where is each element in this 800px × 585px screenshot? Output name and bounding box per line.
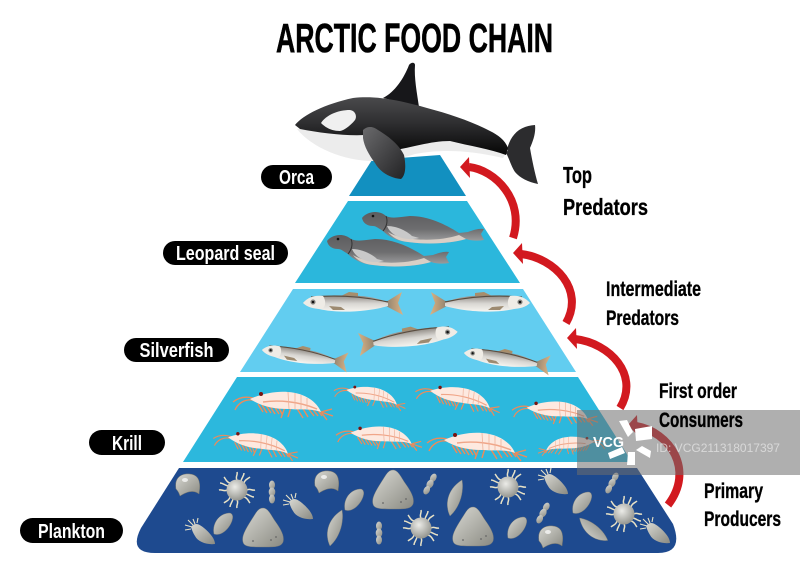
pyramid tier: orca bbox=[349, 155, 466, 196]
caption: Intermediate Predators bbox=[606, 278, 701, 330]
pyramid tier: silverfish bbox=[240, 289, 576, 372]
caption: Primary Producers: Primary bbox=[704, 480, 763, 503]
plankton group bbox=[176, 468, 670, 548]
label: Silverfish: Silverfish bbox=[140, 340, 214, 362]
watermark: VCG bbox=[593, 434, 624, 451]
caption: Top Predators: Predators bbox=[563, 194, 648, 220]
silverfish group bbox=[260, 292, 551, 375]
watermark: ID: VCG211318017397 bbox=[656, 441, 780, 455]
krill group bbox=[212, 383, 606, 461]
seal upper bbox=[362, 212, 484, 243]
label: Orca: Orca bbox=[279, 167, 315, 189]
label: Orca bbox=[261, 165, 332, 189]
label: Leopard seal: Leopard seal bbox=[176, 243, 275, 265]
caption: Top Predators: Top bbox=[563, 162, 592, 188]
arrow: orca to seal bbox=[460, 157, 516, 238]
label: Plankton: Plankton bbox=[38, 521, 105, 543]
arrow: seal to silverfish bbox=[513, 243, 572, 323]
label: Krill: Krill bbox=[112, 433, 142, 455]
caption: First order Consumers: Consumers bbox=[659, 409, 743, 432]
caption: Top Predators bbox=[563, 162, 648, 220]
arrow: silverfish to krill bbox=[567, 328, 626, 408]
pyramid tier: krill bbox=[183, 377, 632, 462]
orca bbox=[295, 63, 538, 184]
label: Krill bbox=[89, 430, 165, 455]
seal lower bbox=[327, 235, 449, 266]
arrow: krill to plankton bbox=[628, 415, 679, 505]
caption: First order Consumers bbox=[659, 380, 743, 432]
title: ARCTIC FOOD CHAIN bbox=[276, 15, 553, 61]
caption: Intermediate Predators: Predators bbox=[606, 307, 679, 330]
pyramid tier: plankton bbox=[137, 468, 676, 553]
caption: Intermediate Predators: Intermediate bbox=[606, 278, 701, 301]
caption: Primary Producers bbox=[704, 480, 781, 531]
pyramid tier: leopard seal bbox=[295, 201, 520, 283]
watermark bbox=[577, 410, 800, 475]
caption: First order Consumers: First order bbox=[659, 380, 737, 403]
